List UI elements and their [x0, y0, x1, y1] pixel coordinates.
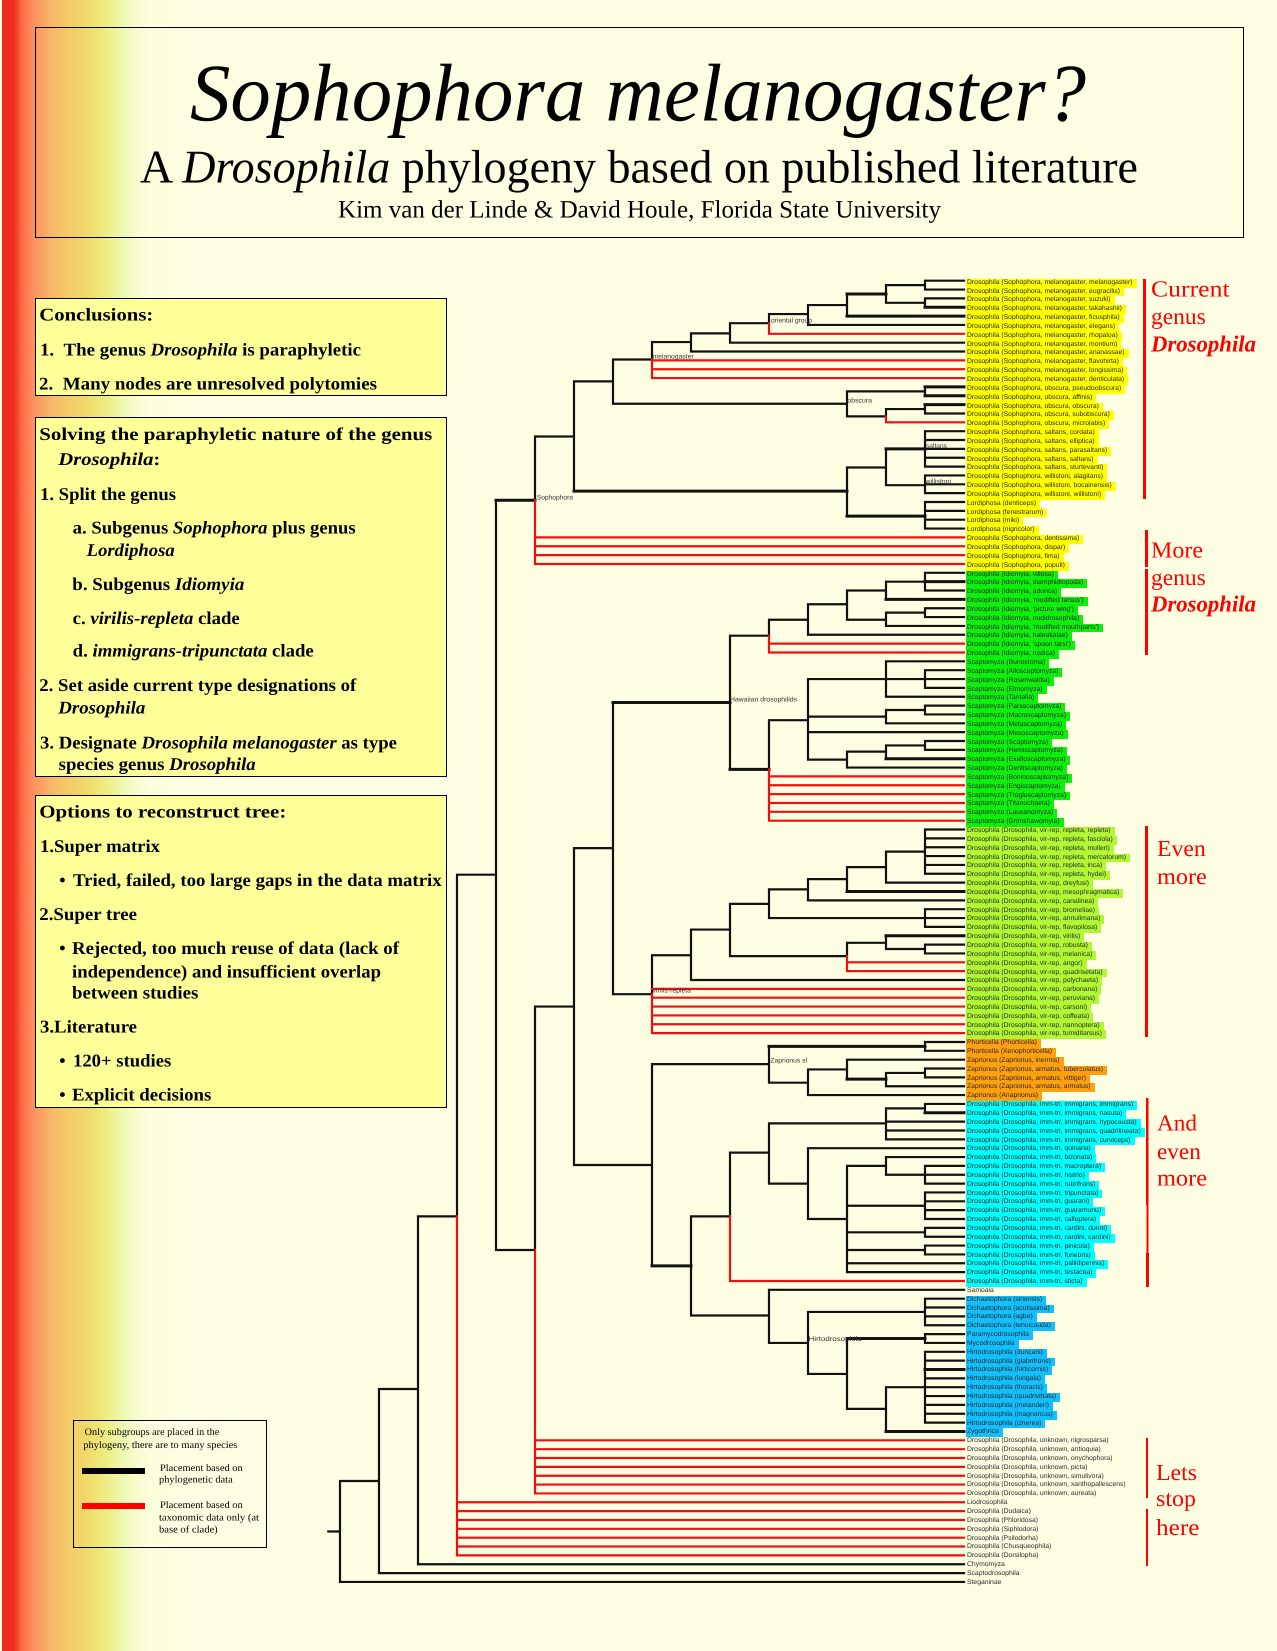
- legend: red line text: base of clade): [159, 1525, 218, 1536]
- labels: immigrans-tripunctata (cyan): Drosophila (Drosophila, imm-tri, tripunctata): [967, 1190, 1098, 1197]
- labels: virilis-repleta (lime): Drosophila (Drosophila, vir-rep, quadrisetata): [967, 968, 1103, 976]
- labels: Idiomyia and Scaptomyza (green): Drosophila (Idiomyia, 'modified tarsus'): [967, 597, 1084, 604]
- item 2: [39, 675, 357, 717]
- clade: Hirtodrosophila: Hirtodrosophila: [809, 1336, 862, 1343]
- labels: Hirtodrosophila group (blue): Hirtodrosophila (melanderi): [967, 1402, 1049, 1409]
- clade: Sophophora: Sophophora: [537, 495, 573, 502]
- labels: immigrans-tripunctata (cyan): Drosophila (Drosophila, imm-tri, cardini, dunni): [967, 1225, 1107, 1232]
- callout: current genus Drosophila: genus: [1151, 304, 1206, 329]
- labels: immigrans-tripunctata (cyan): Drosophila (Drosophila, imm-tri, immigrans, quadrilineata): [967, 1128, 1141, 1135]
- labels: Phorticella and Zaprionus (orange): Zaprionus (Zaprionus, armatus, armatus): [967, 1083, 1091, 1090]
- labels: virilis-repleta (lime): Drosophila (Drosophila, vir-rep, repleta, mercatorum): [967, 854, 1126, 861]
- panel: options to reconstruct tree: [36, 796, 446, 1108]
- labels: immigrans-tripunctata (cyan): Drosophila (Drosophila, imm-tri, histrio): [967, 1172, 1085, 1179]
- option 3 note a: 120+ studies: [73, 1051, 171, 1071]
- labels: subgenus Sophophora and Lordiphosa (yellow): Drosophila (Sophophora, obscura, obscura): [967, 402, 1099, 410]
- labels: immigrans-tripunctata (cyan): Drosophila (Drosophila, imm-tri, funebris): [967, 1252, 1091, 1258]
- labels: Phorticella and Zaprionus (orange): Phorticella (Xenophorticella): [967, 1048, 1052, 1055]
- labels: Hirtodrosophila group (blue): Paramycodrosophila: [967, 1331, 1029, 1338]
- legend: [74, 1420, 266, 1548]
- option 2 note: [59, 938, 400, 1003]
- labels: immigrans-tripunctata (cyan): Drosophila (Drosophila, imm-tri, pallidipennis): [967, 1260, 1104, 1267]
- labels: virilis-repleta (lime): Drosophila (Drosophila, vir-rep, annulimana): [967, 915, 1100, 922]
- labels: Idiomyia and Scaptomyza (green): Scaptomyza (Tantalia): [967, 694, 1034, 701]
- labels: subgenus Sophophora and Lordiphosa (yellow): Drosophila (Sophophora, saltans, elliptica): [967, 438, 1095, 445]
- labels: Idiomyia and Scaptomyza (green): Scaptomyza (Alloscaptomyza): [967, 668, 1058, 675]
- callout: current genus Drosophila: Drosophila: [1150, 332, 1256, 357]
- labels: Idiomyia and Scaptomyza (green): Scaptomyza (Macroscaptomyza): [967, 712, 1066, 719]
- labels: Phorticella and Zaprionus (orange): Zaprionus (Zaprionus, armatus, tuberculatus): [967, 1066, 1103, 1073]
- callout: even more: more: [1157, 864, 1207, 889]
- legend: red line swatch: [82, 1503, 145, 1509]
- conclusion 1: 1. The genus Drosophila is paraphyletic: [40, 339, 361, 359]
- labels: virilis-repleta (lime): Drosophila (Drosophila, vir-rep, repleta, repleta): [967, 827, 1111, 834]
- callout: more genus Drosophila: Drosophila: [1150, 592, 1256, 617]
- legend: black line text: phylogenetic data: [159, 1475, 233, 1486]
- labels: unplaced taxa and outgroups (no highlight): Chymomyza: [967, 1561, 1005, 1568]
- labels: Hirtodrosophila group (blue): Hirtodrosophila (hirticornis): [967, 1366, 1048, 1373]
- labels: subgenus Sophophora and Lordiphosa (yellow): Drosophila (Sophophora, saltans, parasaltans): [967, 447, 1107, 454]
- option 2: 2.Super tree: [39, 904, 137, 924]
- labels: Hirtodrosophila group (blue): [966, 1296, 1060, 1437]
- clade: Hawaiian drosophilids: Hawaiian drosophilids: [730, 697, 798, 704]
- option 2 note: •: [59, 938, 66, 958]
- labels: subgenus Sophophora and Lordiphosa (yellow): Lordiphosa (denticeps): [967, 500, 1036, 507]
- callout: and even more: even: [1157, 1139, 1201, 1164]
- labels: subgenus Sophophora and Lordiphosa (yellow): Drosophila (Sophophora, obscura, affinis): [967, 394, 1092, 401]
- heading: solving: Solving the paraphyletic nature of the genus: [39, 424, 432, 444]
- labels: immigrans-tripunctata (cyan): Drosophila (Drosophila, imm-tri, calloptera): [967, 1216, 1096, 1223]
- legend: red line text: Placement based on: [160, 1500, 243, 1511]
- labels: subgenus Sophophora and Lordiphosa (yellow): Drosophila (Sophophora, melanogaster, eugracilis): [967, 288, 1120, 295]
- labels: virilis-repleta (lime): Drosophila (Drosophila, vir-rep, melanica): [967, 951, 1092, 958]
- labels: unplaced taxa and outgroups (no highlight): Drosophila (Drosophila, unknown, nigrosparsa): [967, 1437, 1109, 1444]
- labels: Idiomyia and Scaptomyza (green): Drosophila (Idiomyia, 'modified mouthparts'): [967, 624, 1099, 631]
- labels: Idiomyia and Scaptomyza (green): Scaptomyza (Engiscaptomyza): [967, 783, 1061, 790]
- labels: Hirtodrosophila group (blue): Hirtodrosophila (quadrivittata): [967, 1393, 1056, 1400]
- callout: and even more: [1157, 1111, 1207, 1191]
- item 2: Drosophila: [57, 697, 145, 717]
- labels: subgenus Sophophora and Lordiphosa (yellow): Drosophila (Sophophora, saltans, saltans): [967, 456, 1094, 463]
- item 3: species genus Drosophila: [59, 754, 256, 774]
- labels: subgenus Sophophora and Lordiphosa (yellow): Drosophila (Sophophora, melanogaster, montium): [967, 341, 1117, 348]
- labels: virilis-repleta (lime): Drosophila (Drosophila, vir-rep, nannoptera): [967, 1022, 1100, 1029]
- labels: subgenus Sophophora and Lordiphosa (yellow): Drosophila (Sophophora, obscura, microlabis): [967, 420, 1105, 427]
- labels: virilis-repleta (lime): Drosophila (Drosophila, vir-rep, carsoni): [967, 1004, 1087, 1011]
- labels: virilis-repleta (lime): Drosophila (Drosophila, vir-rep, flavopilosa): [967, 924, 1097, 931]
- labels: Idiomyia and Scaptomyza (green): Scaptomyza (Mesoscaptomyza): [967, 730, 1064, 737]
- callout: more genus Drosophila: [1150, 538, 1256, 617]
- bracket: current genus Drosophila: [1143, 277, 1256, 499]
- labels: subgenus Sophophora and Lordiphosa (yellow): Drosophila (Sophophora, melanogaster, rhopaloa): [967, 332, 1118, 339]
- labels: virilis-repleta (lime): Drosophila (Drosophila, vir-rep, bromeliae): [967, 907, 1095, 914]
- callout: more genus Drosophila: More: [1151, 538, 1203, 563]
- labels: Idiomyia and Scaptomyza (green): Drosophila (Idiomyia, haleakalae): [967, 632, 1068, 639]
- panel: conclusions: [36, 298, 446, 396]
- labels: Idiomyia and Scaptomyza (green): Scaptomyza (Titanochaeta): [967, 800, 1050, 807]
- labels: immigrans-tripunctata (cyan): Drosophila (Drosophila, imm-tri, immigrans, curviceps): [967, 1137, 1131, 1144]
- labels: immigrans-tripunctata (cyan): Drosophila (Drosophila, imm-tri, immigrans, immigrans): [967, 1101, 1133, 1108]
- labels: virilis-repleta (lime): Drosophila (Drosophila, vir-rep, mesophragmatica): [967, 889, 1119, 896]
- labels: Hirtodrosophila group (blue): Hirtodrosophila (magnarcus): [967, 1411, 1053, 1418]
- labels: subgenus Sophophora and Lordiphosa (yellow): Drosophila (Sophophora, melanogaster, melanogaster): [967, 279, 1132, 286]
- clade: willistoni: willistoni: [924, 479, 951, 486]
- labels: unplaced taxa and outgroups (no highlight): Drosophila (Drosophila, unknown, onychophora): [967, 1455, 1112, 1462]
- item 3: [40, 732, 397, 774]
- labels: unplaced taxa and outgroups (no highlight): Drosophila (Siphlodora): [967, 1526, 1038, 1533]
- title: Sophophora melanogaster?: [190, 48, 1086, 138]
- legend: black line text: Placement based on: [160, 1463, 243, 1474]
- labels: unplaced taxa and outgroups (no highlight): Drosophila (Drosophila, unknown, aureata): [967, 1490, 1096, 1497]
- labels: unplaced taxa and outgroups (no highlight): Steganinae: [967, 1579, 1001, 1586]
- labels: Idiomyia and Scaptomyza (green): Scaptomyza (Dentiscaptomyza): [967, 765, 1063, 772]
- clade labels: [537, 318, 951, 1343]
- labels: Phorticella and Zaprionus (orange): Zaprionus (Anaprionus): [967, 1092, 1038, 1099]
- labels: Hirtodrosophila group (blue): Dichaetophora (acutissima): [967, 1305, 1050, 1312]
- labels: unplaced taxa and outgroups (no highlight): Drosophila (Drosophila, unknown, simulivora): [967, 1473, 1104, 1480]
- authors: Kim van der Linde & David Houle, Florida State University: [338, 196, 941, 224]
- labels: subgenus Sophophora and Lordiphosa (yellow): Drosophila (Sophophora, willistoni, bocainensis): [967, 482, 1112, 489]
- clade: melanogaster: melanogaster: [653, 354, 694, 361]
- labels: subgenus Sophophora and Lordiphosa (yellow): Drosophila (Sophophora, dispar): [967, 544, 1065, 551]
- labels: Phorticella and Zaprionus (orange): [966, 1039, 1107, 1101]
- labels: Idiomyia and Scaptomyza (green): Drosophila (Idiomyia, diamphidiopoda): [967, 579, 1083, 586]
- labels: immigrans-tripunctata (cyan): Drosophila (Drosophila, imm-tri, immigrans, hypocausta): [967, 1119, 1137, 1126]
- labels: unplaced taxa and outgroups (no highlight): Drosophila (Drosophila, unknown, picta): [967, 1464, 1088, 1471]
- labels: subgenus Sophophora and Lordiphosa (yellow): Drosophila (Sophophora, dentissima): [967, 535, 1079, 542]
- header panel: [36, 28, 1244, 238]
- bracket: lets stop here: [1146, 1438, 1200, 1566]
- labels: unplaced taxa and outgroups (no highlight): Drosophila (Drosophila, unknown, antioquia): [967, 1446, 1101, 1453]
- labels: immigrans-tripunctata (cyan): Drosophila (Drosophila, imm-tri, cardini, cardini): [967, 1234, 1111, 1241]
- labels: Idiomyia and Scaptomyza (green): [966, 571, 1103, 827]
- labels: subgenus Sophophora and Lordiphosa (yellow): Lordiphosa (fenestrarum): [967, 509, 1043, 516]
- labels: virilis-repleta (lime): Drosophila (Drosophila, vir-rep, carbonana): [967, 986, 1097, 993]
- labels: Idiomyia and Scaptomyza (green): Drosophila (Idiomyia, nudidrosophila): [967, 615, 1079, 622]
- legend note: phylogeny, there are to many species: [83, 1440, 237, 1451]
- labels: subgenus Sophophora and Lordiphosa (yellow): Drosophila (Sophophora, obscura, subobscura): [967, 411, 1110, 418]
- labels: subgenus Sophophora and Lordiphosa (yellow): Drosophila (Sophophora, melanogaster, suzuki): [967, 296, 1111, 303]
- option 3 note b: •: [59, 1085, 66, 1105]
- item 1d: d. immigrans-tripunctata clade: [73, 641, 314, 661]
- callout: more genus Drosophila: genus: [1151, 565, 1206, 590]
- labels: unplaced taxa and outgroups (no highlight): Drosophila (Dudaica): [967, 1508, 1031, 1515]
- labels: unplaced taxa and outgroups (no highlight): Drosophila (Phloridosa): [967, 1517, 1038, 1524]
- labels: immigrans-tripunctata (cyan): Drosophila (Drosophila, imm-tri, guaramunu): [967, 1207, 1101, 1214]
- labels: virilis-repleta (lime): Drosophila (Drosophila, vir-rep, repleta, mulleri): [967, 845, 1110, 852]
- item 1a: Lordiphosa: [86, 540, 175, 560]
- labels: immigrans-tripunctata (cyan): Drosophila (Drosophila, imm-tri, testacea): [967, 1269, 1092, 1276]
- phylogenetic tree: [328, 281, 964, 1582]
- labels: virilis-repleta (lime): Drosophila (Drosophila, vir-rep, tumiditarsus): [967, 1030, 1102, 1037]
- labels: Phorticella and Zaprionus (orange): Zaprionus (Zaprionus, armatus, vittiger): [967, 1075, 1086, 1082]
- thicker black branches: [496, 294, 964, 1431]
- labels: Phorticella and Zaprionus (orange): Phorticella (Phorticella): [967, 1039, 1037, 1046]
- labels: Hirtodrosophila group (blue): Hirtodrosophila (thoracis): [967, 1384, 1043, 1391]
- red branches: taxonomic placement: [457, 323, 964, 1555]
- panel: solving the paraphyly: [36, 418, 446, 776]
- labels: Idiomyia and Scaptomyza (green): Scaptomyza (Elmomyza): [967, 686, 1043, 692]
- option 3: 3.Literature: [40, 1017, 137, 1037]
- callout: current genus Drosophila: [1150, 277, 1256, 357]
- labels: subgenus Sophophora and Lordiphosa (yellow): Lordiphosa (nigricolor): [967, 526, 1035, 533]
- labels: Idiomyia and Scaptomyza (green): Drosophila (Idiomyia, adunca): [967, 588, 1057, 595]
- callout: and even more: more: [1157, 1166, 1207, 1191]
- labels: Hirtodrosophila group (blue): Hirtodrosophila (glabrifrons): [967, 1358, 1051, 1365]
- labels: subgenus Sophophora and Lordiphosa (yellow): Drosophila (Sophophora, willistoni, alagitans): [967, 473, 1103, 480]
- legend: red line text: taxonomic data only (at: [159, 1513, 259, 1524]
- labels: unplaced taxa and outgroups (no highlight): Scaptodrosophila: [967, 1570, 1020, 1577]
- item 1a: [73, 517, 356, 560]
- labels: Hirtodrosophila group (blue): Zygothrica: [967, 1428, 999, 1435]
- clade: Zaprionus sl: Zaprionus sl: [770, 1057, 807, 1064]
- item 2: 2. Set aside current type designations of: [39, 675, 357, 695]
- labels: subgenus Sophophora and Lordiphosa (yellow): Drosophila (Sophophora, melanogaster, denticulata): [967, 376, 1124, 383]
- item 1: 1. Split the genus: [40, 484, 176, 504]
- callout: lets stop here: here: [1156, 1515, 1200, 1540]
- labels: Idiomyia and Scaptomyza (green): Scaptomyza (Hemiscaptomyza): [967, 747, 1063, 754]
- option 3 note a: •: [59, 1051, 66, 1071]
- labels: unplaced taxa and outgroups (no highlight): [967, 1437, 1126, 1586]
- labels: immigrans-tripunctata (cyan): Drosophila (Drosophila, imm-tri, guarani): [967, 1198, 1089, 1205]
- labels: unplaced taxa and outgroups (no highlight): Drosophila (Dorsilopha): [967, 1552, 1038, 1559]
- labels: virilis-repleta (lime): Drosophila (Drosophila, vir-rep, coffeata): [967, 1013, 1089, 1020]
- labels: Idiomyia and Scaptomyza (green): Scaptomyza (Rosenwaldia): [967, 677, 1050, 684]
- labels: Idiomyia and Scaptomyza (green): Drosophila (Idiomyia, villosa): [967, 571, 1054, 578]
- labels: virilis-repleta (lime): [966, 827, 1130, 1039]
- legend: black line swatch: [82, 1468, 145, 1474]
- labels: Idiomyia and Scaptomyza (green): Scaptomyza (Bunostoma): [967, 659, 1045, 666]
- item 1a: a. Subgenus Sophophora plus genus: [73, 517, 356, 537]
- item 3: 3. Designate Drosophila melanogaster as type: [40, 732, 397, 752]
- item 1b: b. Subgenus Idiomyia: [72, 574, 244, 594]
- heading: solving: Drosophila :: [57, 449, 160, 469]
- labels: Idiomyia and Scaptomyza (green): Scaptomyza (Scaptomyza): [967, 739, 1048, 746]
- heading: options: Options to reconstruct tree:: [39, 802, 286, 822]
- clade: obscura: obscura: [847, 398, 872, 405]
- subtitle: A Drosophila phylogeny based on published literature: [140, 142, 1138, 194]
- conclusion 2: 2. Many nodes are unresolved polytomies: [39, 373, 377, 393]
- legend: black line text: [159, 1463, 243, 1486]
- labels: Idiomyia and Scaptomyza (green): Scaptomyza (Boninoscaptomyza): [967, 774, 1068, 781]
- legend note: Only subgroups are placed in the: [85, 1427, 220, 1438]
- bracket: more genus Drosophila: [1145, 530, 1256, 655]
- labels: subgenus Sophophora and Lordiphosa (yellow): Lordiphosa (miki): [967, 517, 1019, 524]
- legend: red line text: [159, 1500, 259, 1536]
- callout: current genus Drosophila: Current: [1151, 277, 1230, 302]
- labels: virilis-repleta (lime): Drosophila (Drosophila, vir-rep, virilis): [967, 933, 1080, 940]
- labels: subgenus Sophophora and Lordiphosa (yellow): Drosophila (Sophophora, melanogaster, longissima): [967, 367, 1123, 374]
- option 1 note: •: [59, 870, 66, 890]
- labels: Idiomyia and Scaptomyza (green): Scaptomyza (Trogloscaptomyza): [967, 792, 1066, 799]
- labels: unplaced taxa and outgroups (no highlight): Drosophila (Chusqueophila): [967, 1543, 1051, 1550]
- clade: virilis-repleta: virilis-repleta: [653, 987, 691, 994]
- labels: unplaced taxa and outgroups (no highlight): Drosophila (Psilodorha): [967, 1534, 1038, 1542]
- callout: lets stop here: [1156, 1460, 1200, 1540]
- legend note: [83, 1427, 237, 1451]
- label: Samoaia: Samoaia: [967, 1287, 994, 1294]
- labels: immigrans-tripunctata (cyan): Drosophila (Drosophila, imm-tri, immigrans, nasuta): [967, 1110, 1122, 1117]
- labels: subgenus Sophophora and Lordiphosa (yellow): Drosophila (Sophophora, willistoni, willistoni): [967, 491, 1101, 498]
- labels: virilis-repleta (lime): Drosophila (Drosophila, vir-rep, angor): [967, 960, 1083, 967]
- labels: virilis-repleta (lime): Drosophila (Drosophila, vir-rep, polychaeta): [967, 977, 1098, 984]
- labels: subgenus Sophophora and Lordiphosa (yellow): Drosophila (Sophophora, populi): [967, 562, 1065, 569]
- labels: virilis-repleta (lime): Drosophila (Drosophila, vir-rep, peruviana): [967, 995, 1095, 1002]
- labels: subgenus Sophophora and Lordiphosa (yellow): Drosophila (Sophophora, melanogaster, ficusphila): [967, 314, 1120, 321]
- option 2 note: Rejected, too much reuse of data (lack of: [72, 938, 400, 958]
- labels: Idiomyia and Scaptomyza (green): Scaptomyza (Metascaptomyza): [967, 721, 1062, 728]
- callout: lets stop here: stop: [1156, 1486, 1196, 1511]
- labels: Idiomyia and Scaptomyza (green): Scaptomyza (Parascaptomyza): [967, 703, 1061, 710]
- labels: unplaced taxa and outgroups (no highlight): Drosophila (Drosophila, unknown, xanthopallescens): [967, 1481, 1126, 1488]
- labels: immigrans-tripunctata (cyan): Drosophila (Drosophila, imm-tri, sticta): [967, 1278, 1083, 1285]
- labels: Idiomyia and Scaptomyza (green): Scaptomyza (Exalloscaptomyza): [967, 756, 1066, 763]
- labels: Hirtodrosophila group (blue): Mycodrosophila: [967, 1340, 1015, 1347]
- option 2 note: between studies: [72, 983, 198, 1003]
- labels: virilis-repleta (lime): Drosophila (Drosophila, vir-rep, robusta): [967, 942, 1088, 949]
- labels: Idiomyia and Scaptomyza (green): Drosophila (Idiomyia, 'picture wing'): [967, 606, 1074, 613]
- labels: virilis-repleta (lime): Drosophila (Drosophila, vir-rep, repleta, inca): [967, 862, 1102, 869]
- labels: virilis-repleta (lime): Drosophila (Drosophila, vir-rep, dreyfusi): [967, 880, 1089, 887]
- labels: subgenus Sophophora and Lordiphosa (yellow): Drosophila (Sophophora, saltans, cordata): [967, 429, 1095, 436]
- labels: subgenus Sophophora and Lordiphosa (yellow): Drosophila (Sophophora, fima): [967, 553, 1060, 560]
- clade: saltans: saltans: [926, 443, 948, 450]
- labels: Phorticella and Zaprionus (orange): Zaprionus (Zaprionus, inermis): [967, 1057, 1060, 1064]
- heading: solving: [39, 424, 432, 469]
- callout: and even more: And: [1157, 1111, 1197, 1136]
- labels: subgenus Sophophora and Lordiphosa (yellow): [966, 279, 1137, 571]
- callout: lets stop here: Lets: [1156, 1460, 1197, 1485]
- labels: virilis-repleta (lime): Drosophila (Drosophila, vir-rep, repleta, fasciola): [967, 836, 1113, 843]
- labels: immigrans-tripunctata (cyan): [966, 1101, 1145, 1287]
- black branches: phylogenetic placement: [328, 281, 964, 1582]
- labels: unplaced taxa and outgroups (no highlight): Liodrosophila: [967, 1499, 1007, 1506]
- heading: conclusions: Conclusions:: [39, 304, 153, 324]
- clade: oriental group: oriental group: [771, 318, 812, 325]
- labels: subgenus Sophophora and Lordiphosa (yellow): Drosophila (Sophophora, obscura, pseudoobscura): [967, 385, 1121, 392]
- labels: immigrans-tripunctata (cyan): Drosophila (Drosophila, imm-tri, rubrifrons): [967, 1181, 1095, 1188]
- option 3 note b: Explicit decisions: [72, 1085, 211, 1105]
- labels: subgenus Sophophora and Lordiphosa (yellow): Drosophila (Sophophora, saltans, sturtevanti): [967, 464, 1103, 471]
- option 1 note: Tried, failed, too large gaps in the data matrix: [73, 870, 442, 890]
- labels: Hirtodrosophila group (blue): Hirtodrosophila (longala): [967, 1375, 1041, 1382]
- labels: Hirtodrosophila group (blue): Dichaetophora (agbo): [967, 1313, 1033, 1320]
- labels: immigrans-tripunctata (cyan): Drosophila (Drosophila, imm-tri, quinaria): [967, 1145, 1091, 1152]
- labels: Hirtodrosophila group (blue): Dichaetophora (tenuicauda): [967, 1322, 1051, 1329]
- callout: even more: [1157, 836, 1207, 889]
- labels: Hirtodrosophila group (blue): Hirtodrosophila (cinerea): [967, 1420, 1041, 1427]
- species labels column: [966, 279, 1145, 1586]
- labels: subgenus Sophophora and Lordiphosa (yellow): Drosophila (Sophophora, melanogaster, elegans): [967, 323, 1115, 330]
- labels: Idiomyia and Scaptomyza (green): Drosophila (Idiomyia, 'spoon tarsi'): [967, 641, 1071, 648]
- labels: virilis-repleta (lime): Drosophila (Drosophila, vir-rep, canalinea): [967, 898, 1094, 905]
- labels: subgenus Sophophora and Lordiphosa (yellow): Drosophila (Sophophora, melanogaster, takahashii): [967, 305, 1122, 312]
- bracket: and even more: [1146, 1098, 1207, 1287]
- labels: Hirtodrosophila group (blue): Dichaetophora (sinensis): [967, 1296, 1042, 1303]
- labels: Idiomyia and Scaptomyza (green): Drosophila (Idiomyia, rustica): [967, 650, 1055, 657]
- option 2 note: independence) and insufficient overlap: [72, 961, 381, 981]
- bracket: even more: [1145, 826, 1207, 1037]
- labels: immigrans-tripunctata (cyan): Drosophila (Drosophila, imm-tri, macroptera): [967, 1163, 1101, 1170]
- labels: immigrans-tripunctata (cyan): Drosophila (Drosophila, imm-tri, pinicola): [967, 1243, 1090, 1250]
- labels: Idiomyia and Scaptomyza (green): Scaptomyza (Grimshawomyia): [967, 818, 1060, 825]
- labels: subgenus Sophophora and Lordiphosa (yellow): Drosophila (Sophophora, melanogaster, ananassae): [967, 349, 1125, 356]
- callout: even more: Even: [1157, 836, 1206, 861]
- labels: Idiomyia and Scaptomyza (green): Scaptomyza (Lauxanomyza): [967, 809, 1053, 816]
- labels: Hirtodrosophila group (blue): Hirtodrosophila (duncani): [967, 1349, 1043, 1356]
- labels: virilis-repleta (lime): Drosophila (Drosophila, vir-rep, repleta, hydei): [967, 871, 1106, 878]
- item 1c: c. virilis-repleta clade: [73, 608, 240, 628]
- labels: immigrans-tripunctata (cyan): Drosophila (Drosophila, imm-tri, bizonata): [967, 1154, 1092, 1161]
- labels: subgenus Sophophora and Lordiphosa (yellow): Drosophila (Sophophora, melanogaster, flavohirta): [967, 358, 1119, 365]
- option 1: 1.Super matrix: [40, 836, 160, 856]
